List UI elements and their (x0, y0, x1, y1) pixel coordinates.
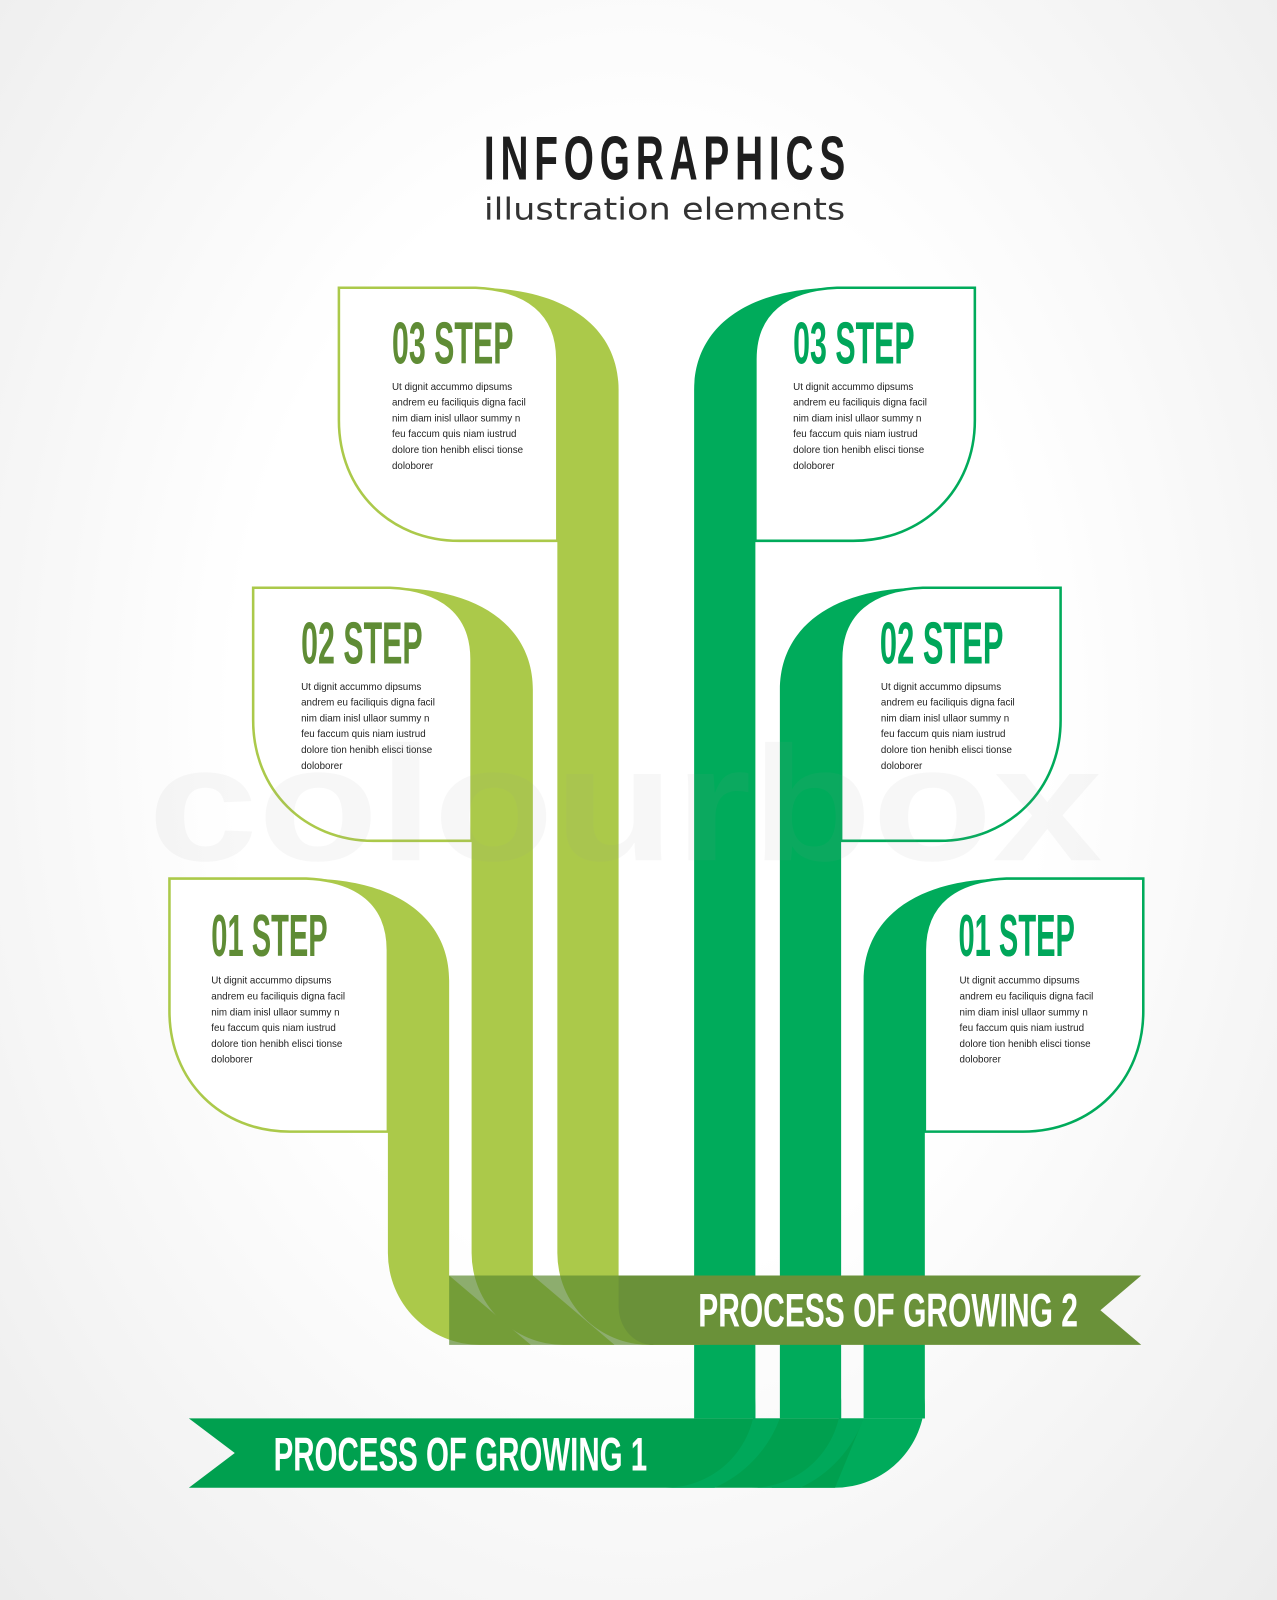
leaf: right 02 step: 02 STEP (880, 609, 1003, 676)
leaf: right 03 step (755, 288, 975, 541)
leaf: left 02 step (253, 588, 472, 841)
leaf: right 01 step: nim diam inisl ullaor summy n (960, 1007, 1088, 1018)
leaf: left 02 step: dolore tion henibh elisci tionse (301, 745, 432, 756)
leaf: left 01 step (169, 879, 388, 1132)
leaf: left 01 step: doloborer (211, 1055, 253, 1066)
leaf: left 02 step: 02 STEP (301, 609, 423, 676)
leaf: right 02 step: andrem eu faciliquis digna facil (881, 698, 1015, 709)
leaf: right 01 step (925, 879, 1143, 1132)
leaf: left 03 step: dolore tion henibh elisci tionse (392, 445, 523, 456)
ribbon: process of growing 1: PROCESS OF GROWING 1 (274, 1428, 647, 1480)
ribbon: process of growing 2 (449, 1276, 1141, 1345)
leaf: left 02 step: Ut dignit accummo dipsums (301, 682, 421, 693)
leaf: right 01 step: feu faccum quis niam iustrud (960, 1023, 1084, 1034)
right stems (process 1) (694, 288, 1006, 1488)
leaf: right 02 step: Ut dignit accummo dipsums (881, 682, 1001, 693)
leaf: left 02 step: andrem eu faciliquis digna facil (301, 698, 435, 709)
title (484, 123, 845, 227)
title: INFOGRAPHICS (484, 123, 845, 193)
leaf: right 03 step: dolore tion henibh elisci tionse (793, 445, 924, 456)
leaf: left 02 step: nim diam inisl ullaor summy n (301, 713, 429, 724)
leaf: left 01 step: feu faccum quis niam iustrud (211, 1023, 336, 1034)
leaf: left 02 step: doloborer (301, 761, 343, 772)
leaf: right 03 step: feu faccum quis niam iustrud (793, 429, 918, 440)
leaf: left 01 step: 01 STEP (211, 902, 328, 969)
leaf: left 01 step: nim diam inisl ullaor summy n (211, 1007, 340, 1018)
leaf: right 03 step: Ut dignit accummo dipsums (793, 382, 913, 393)
leaf: right 02 step: doloborer (881, 761, 923, 772)
leaf: right 01 step: doloborer (960, 1055, 1002, 1066)
left stems (process 2) (306, 288, 700, 1345)
subtitle: illustration elements (484, 192, 845, 227)
leaf: left 01 step: dolore tion henibh elisci tionse (211, 1039, 342, 1050)
leaf: left 03 step (339, 288, 557, 541)
leaf: right 02 step: feu faccum quis niam iustrud (881, 729, 1005, 740)
leaf: right 03 step: 03 STEP (793, 309, 915, 376)
leaf: right 01 step: 01 STEP (959, 902, 1075, 969)
leaf: left 03 step: feu faccum quis niam iustrud (392, 429, 517, 440)
leaf: right 03 step: doloborer (793, 461, 835, 472)
leaf: right 02 step: nim diam inisl ullaor summy n (881, 713, 1009, 724)
watermark: colourbox (148, 712, 1102, 895)
leaf: right 01 step: Ut dignit accummo dipsums (960, 976, 1080, 987)
leaf: right 01 step: dolore tion henibh elisci tionse (960, 1039, 1091, 1050)
leaf: left 01 step: Ut dignit accummo dipsums (211, 976, 332, 987)
ribbon: process of growing 2: PROCESS OF GROWING 2 (698, 1285, 1078, 1337)
leaf: left 03 step: 03 STEP (392, 309, 513, 376)
leaf: left 03 step: nim diam inisl ullaor summy n (392, 413, 520, 424)
ribbon: process of growing 1 (189, 1398, 864, 1488)
leaf: right 03 step: nim diam inisl ullaor summy n (793, 413, 921, 424)
leaf: left 01 step: andrem eu faciliquis digna facil (211, 991, 345, 1002)
leaf: right 03 step: andrem eu faciliquis digna facil (793, 398, 927, 409)
leaf: left 03 step: doloborer (392, 461, 434, 472)
leaf: left 03 step: andrem eu faciliquis digna facil (392, 398, 526, 409)
leaf: left 02 step: feu faccum quis niam iustrud (301, 729, 426, 740)
leaf: right 01 step: andrem eu faciliquis digna facil (960, 991, 1093, 1002)
leaf: left 03 step: Ut dignit accummo dipsums (392, 382, 512, 393)
leaf: right 02 step: dolore tion henibh elisci tionse (881, 745, 1012, 756)
leaf: right 02 step (841, 588, 1061, 841)
